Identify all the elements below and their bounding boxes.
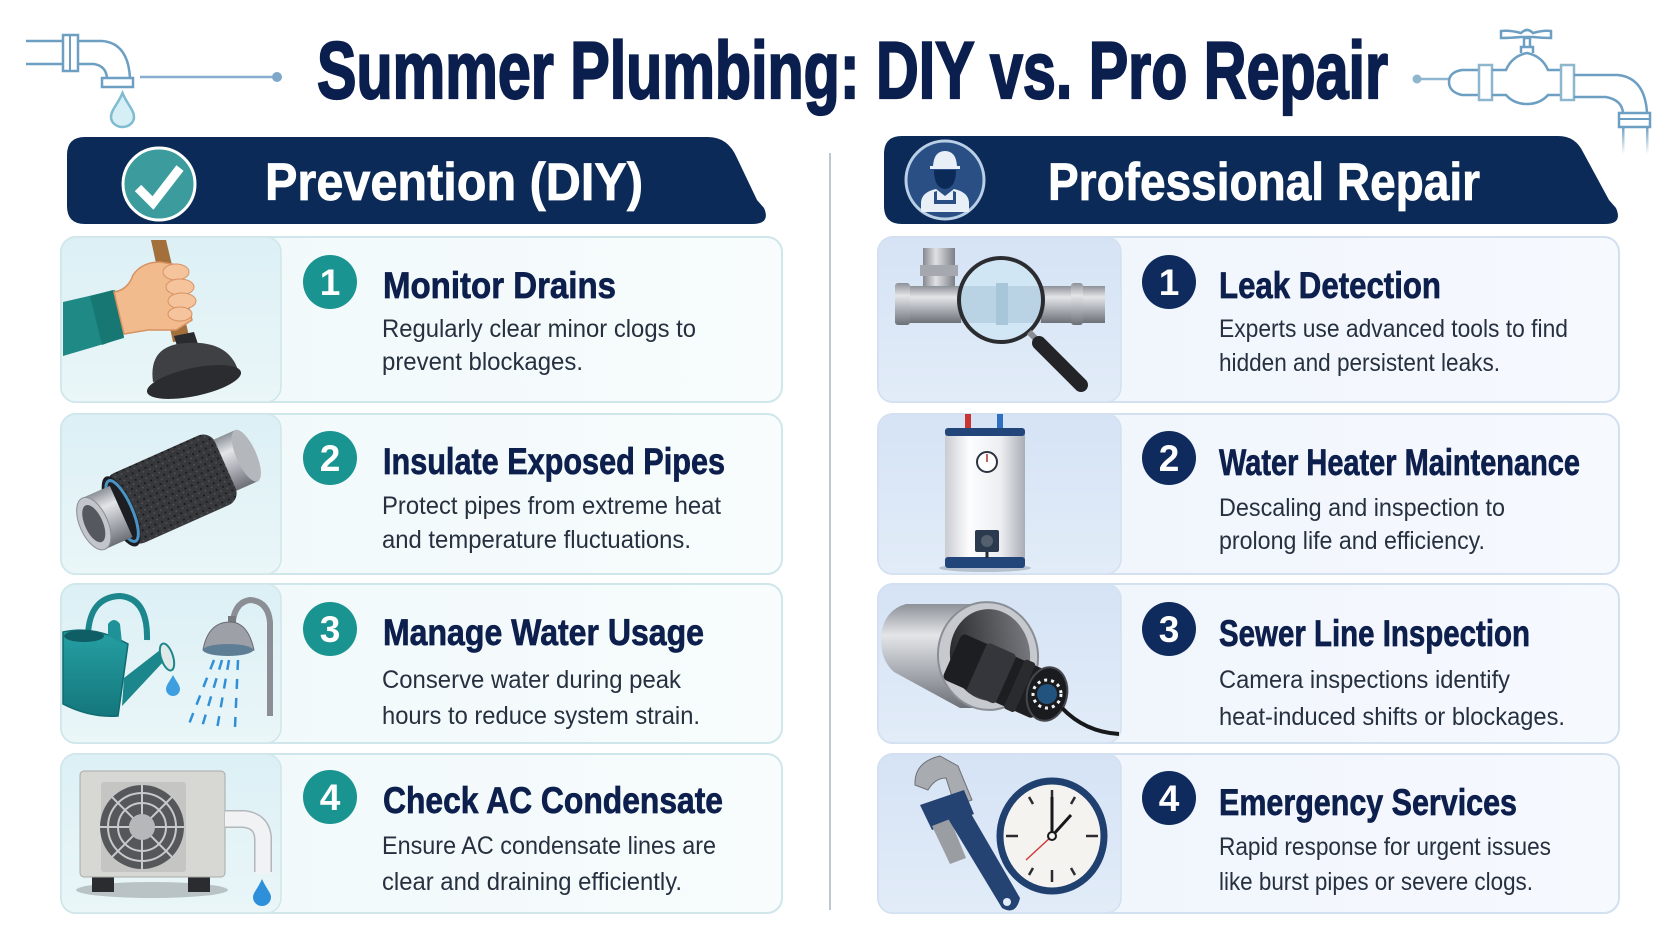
number badge 3: 3 (1159, 609, 1179, 650)
panel: Professional Repair column (878, 136, 1619, 913)
text: Sewer Line Inspection: Camera inspections identify (1219, 666, 1510, 694)
text: Emergency Services: Emergency Services (1219, 782, 1517, 823)
card 3: Sewer Line Inspection (878, 584, 1619, 743)
text: Insulate Exposed Pipes: Protect pipes from extreme heat (382, 492, 721, 520)
number badge 1: 1 (320, 262, 340, 303)
text: Leak Detection (1219, 265, 1568, 377)
card 2: Water Heater Maintenance (878, 414, 1619, 574)
card 1: Leak Detection (878, 237, 1619, 402)
number badge 2: 2 (1159, 438, 1179, 479)
divider line between columns (829, 153, 831, 910)
text: Check AC Condensate: clear and draining efficiently. (382, 868, 682, 896)
text: Manage Water Usage (382, 612, 704, 730)
heading banner: Prevention (DIY): Prevention (DIY) (265, 153, 643, 212)
text: Manage Water Usage: hours to reduce system strain. (382, 702, 700, 730)
number badge 1 (1142, 255, 1196, 309)
text: Leak Detection: Leak Detection (1219, 265, 1441, 306)
icon: pipe wrench (915, 756, 1020, 910)
text: Sewer Line Inspection (1219, 613, 1565, 731)
panel: Prevention (DIY) column (61, 137, 782, 913)
text: Insulate Exposed Pipes: Insulate Exposed Pipes (383, 441, 725, 482)
text: Insulate Exposed Pipes: and temperature fluctuations. (382, 526, 691, 554)
text: Manage Water Usage: Manage Water Usage (383, 612, 704, 653)
number badge 3 (1142, 602, 1196, 656)
card 4: Check AC Condensate (61, 754, 782, 913)
text: Emergency Services (1219, 782, 1551, 896)
text: Sewer Line Inspection: Sewer Line Inspection (1219, 613, 1530, 654)
icon: watering can (63, 596, 180, 716)
number badge 3 (303, 602, 357, 656)
text: Check AC Condensate (382, 780, 723, 896)
number badge 1 (303, 255, 357, 309)
text: Leak Detection: Experts use advanced tools to find (1219, 315, 1568, 343)
number badge 3: 3 (320, 609, 340, 650)
text: Monitor Drains: Regularly clear minor clogs to (382, 315, 696, 343)
text: Manage Water Usage: Conserve water during peak (382, 666, 681, 694)
card 1: Monitor Drains (61, 237, 782, 406)
icon: shower (189, 600, 270, 729)
text: Water Heater Maintenance: prolong life and efficiency. (1219, 527, 1485, 555)
icon: AC outdoor unit (76, 771, 271, 906)
number badge 4: 4 (320, 777, 341, 818)
card 4: Emergency Services (878, 754, 1619, 913)
text: Leak Detection: hidden and persistent leaks. (1219, 349, 1500, 377)
text: Monitor Drains: Monitor Drains (383, 265, 616, 306)
heading banner: Professional Repair (884, 136, 1618, 224)
heading banner: Professional Repair: Professional Repair (1048, 153, 1480, 212)
icon: check mark (123, 148, 195, 220)
text: Check AC Condensate: Ensure AC condensate lines are (382, 832, 716, 860)
text: Water Heater Maintenance (1219, 442, 1580, 555)
number badge 4 (1142, 771, 1196, 825)
text: Monitor Drains (382, 265, 696, 376)
text: Emergency Services: Rapid response for urgent issues (1219, 833, 1551, 861)
number badge 4 (303, 770, 357, 824)
icon: right valve pipe (1412, 30, 1650, 154)
text: Sewer Line Inspection: heat-induced shifts or blockages. (1219, 703, 1565, 731)
icon: left faucet pipe with drop (26, 35, 282, 127)
text: Check AC Condensate: Check AC Condensate (383, 780, 723, 821)
text: Water Heater Maintenance: Descaling and inspection to (1219, 494, 1505, 522)
icon: clock (1000, 781, 1104, 891)
number badge 4: 4 (1159, 778, 1180, 819)
icon: sewer camera in pipe (881, 596, 1119, 734)
number badge 1: 1 (1159, 262, 1179, 303)
card 2: Insulate Exposed Pipes (61, 414, 782, 574)
icon: hand holding plunger (63, 240, 244, 406)
icon: water heater (939, 414, 1031, 572)
heading banner: Prevention (DIY) (67, 137, 766, 224)
text: Water Heater Maintenance: Water Heater Maintenance (1219, 442, 1580, 483)
icon: plumber in circle (906, 141, 984, 219)
text: Insulate Exposed Pipes (382, 441, 725, 554)
icon: magnifier over pipe (895, 248, 1105, 385)
icon: insulated pipe (66, 417, 271, 564)
number badge 2 (1142, 431, 1196, 485)
number badge 2: 2 (320, 438, 340, 479)
text: Emergency Services: like burst pipes or severe clogs. (1219, 868, 1533, 896)
card 3: Manage Water Usage (61, 584, 782, 743)
number badge 2 (303, 431, 357, 485)
text: Monitor Drains: prevent blockages. (382, 348, 583, 376)
